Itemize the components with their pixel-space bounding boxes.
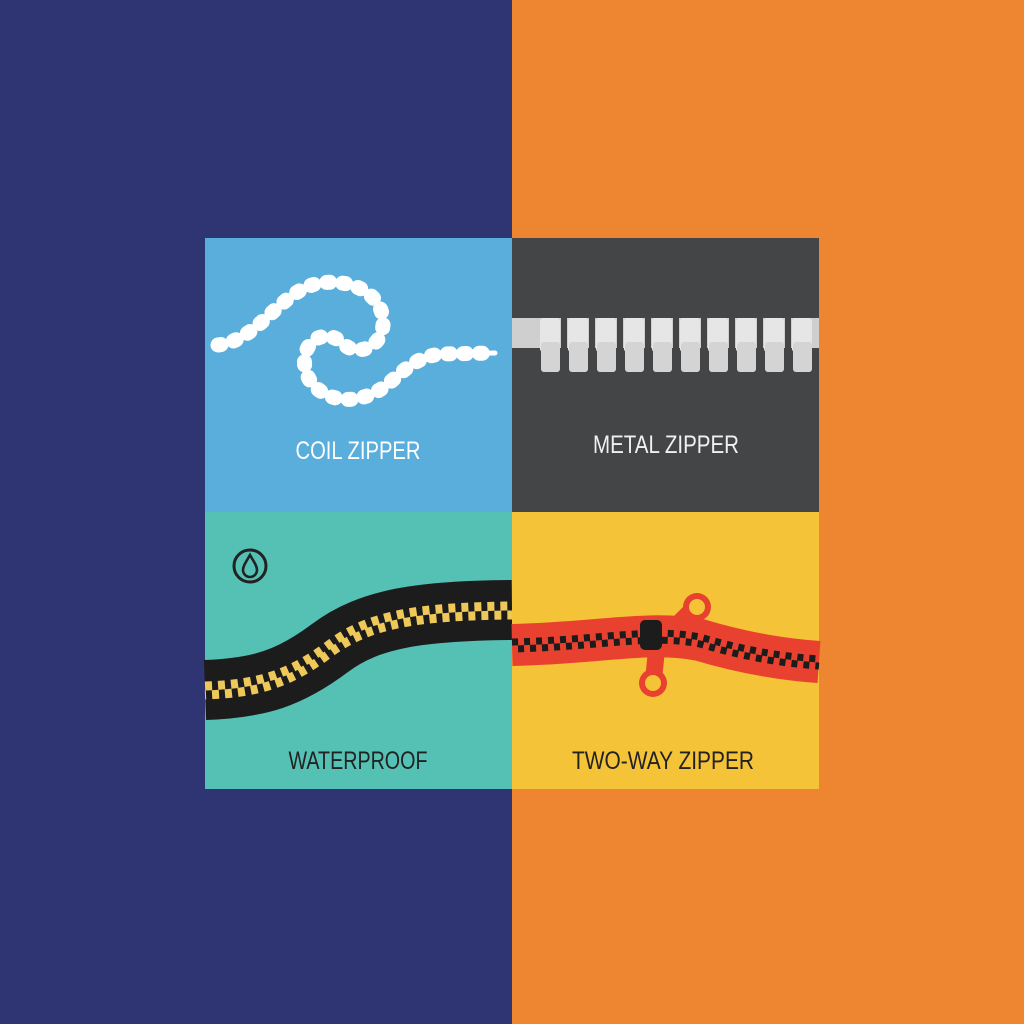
label: waterproof: WATERPROOF [288, 747, 428, 775]
icon: two-way zipper [512, 593, 819, 697]
label: coil zipper: COIL ZIPPER [296, 437, 420, 465]
background left [0, 0, 512, 1024]
background right [512, 0, 1024, 1024]
panel: waterproof [205, 512, 512, 789]
pull tab upper [660, 593, 711, 630]
panel: two-way zipper [512, 512, 819, 789]
icon: waterproof zipper band [205, 606, 512, 695]
panel: coil zipper [205, 238, 512, 512]
icon: coil [218, 282, 495, 399]
icon: water drop [234, 550, 266, 582]
label: two-way zipper: TWO-WAY ZIPPER [572, 747, 754, 775]
slider [640, 620, 662, 650]
panel: metal zipper [512, 238, 819, 512]
icon: metal teeth [512, 318, 819, 372]
label: metal zipper: METAL ZIPPER [593, 431, 739, 459]
pull tab lower [639, 650, 667, 697]
